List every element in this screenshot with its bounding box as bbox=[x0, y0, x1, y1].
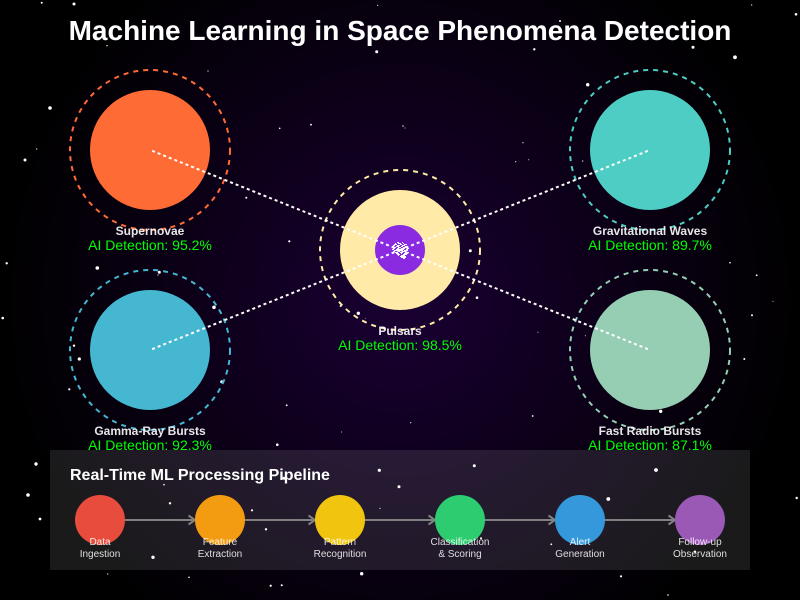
step: alert generation: Generation bbox=[555, 549, 605, 560]
phenomenon: supernovae bbox=[70, 70, 230, 230]
label: gamma-ray bursts bbox=[88, 424, 212, 453]
step: data ingestion: Data bbox=[89, 537, 111, 548]
label: fast radio bursts bbox=[588, 424, 712, 453]
step: alert generation: Alert bbox=[570, 537, 591, 548]
label: supernovae: Supernovae bbox=[116, 224, 185, 238]
panel: pipeline bbox=[50, 450, 750, 570]
phenomenon: gravitational waves bbox=[570, 70, 730, 230]
step: feature extraction: Feature bbox=[203, 537, 238, 548]
step: feature extraction: Extraction bbox=[198, 549, 242, 560]
label: gamma-ray bursts: AI Detection: 92.3% bbox=[88, 437, 212, 453]
phenomenon: fast radio bursts bbox=[570, 270, 730, 430]
step: follow-up observation bbox=[673, 495, 727, 560]
label: gravitational waves: Gravitational Waves bbox=[593, 224, 707, 238]
phenomenon: pulsars bbox=[320, 170, 480, 330]
step: data ingestion: Ingestion bbox=[80, 549, 120, 560]
label: gravitational waves: AI Detection: 89.7% bbox=[588, 237, 712, 253]
label: supernovae: AI Detection: 95.2% bbox=[88, 237, 212, 253]
step: follow-up observation: Observation bbox=[673, 549, 727, 560]
step: pattern recognition bbox=[314, 495, 366, 560]
step: classification and scoring: & Scoring bbox=[438, 549, 482, 560]
label: fast radio bursts: Fast Radio Bursts bbox=[599, 424, 702, 438]
step: pattern recognition: Recognition bbox=[314, 549, 366, 560]
connection lines bbox=[150, 150, 650, 350]
label: pulsars bbox=[338, 324, 462, 353]
label: fast radio bursts: AI Detection: 87.1% bbox=[588, 437, 712, 453]
label: gamma-ray bursts: Gamma-Ray Bursts bbox=[94, 424, 206, 438]
step: pattern recognition: Pattern bbox=[324, 537, 356, 548]
step: classification and scoring: Classification bbox=[431, 537, 489, 548]
step: follow-up observation: Follow-up bbox=[678, 537, 722, 548]
title: Machine Learning in Space Phenomena Detection bbox=[69, 15, 731, 46]
step: alert generation bbox=[555, 495, 605, 560]
step: classification and scoring bbox=[431, 495, 489, 560]
step: data ingestion bbox=[75, 495, 125, 560]
label: pulsars: Pulsars bbox=[378, 324, 422, 338]
label: pulsars: AI Detection: 98.5% bbox=[338, 337, 462, 353]
step: feature extraction bbox=[195, 495, 245, 560]
label: gravitational waves bbox=[588, 224, 712, 253]
pipeline heading: Real-Time ML Processing Pipeline bbox=[70, 467, 330, 484]
icon: central data cluster bbox=[392, 242, 409, 258]
phenomenon: gamma-ray bursts bbox=[70, 270, 230, 430]
arrows bbox=[125, 516, 675, 524]
label: supernovae bbox=[88, 224, 212, 253]
